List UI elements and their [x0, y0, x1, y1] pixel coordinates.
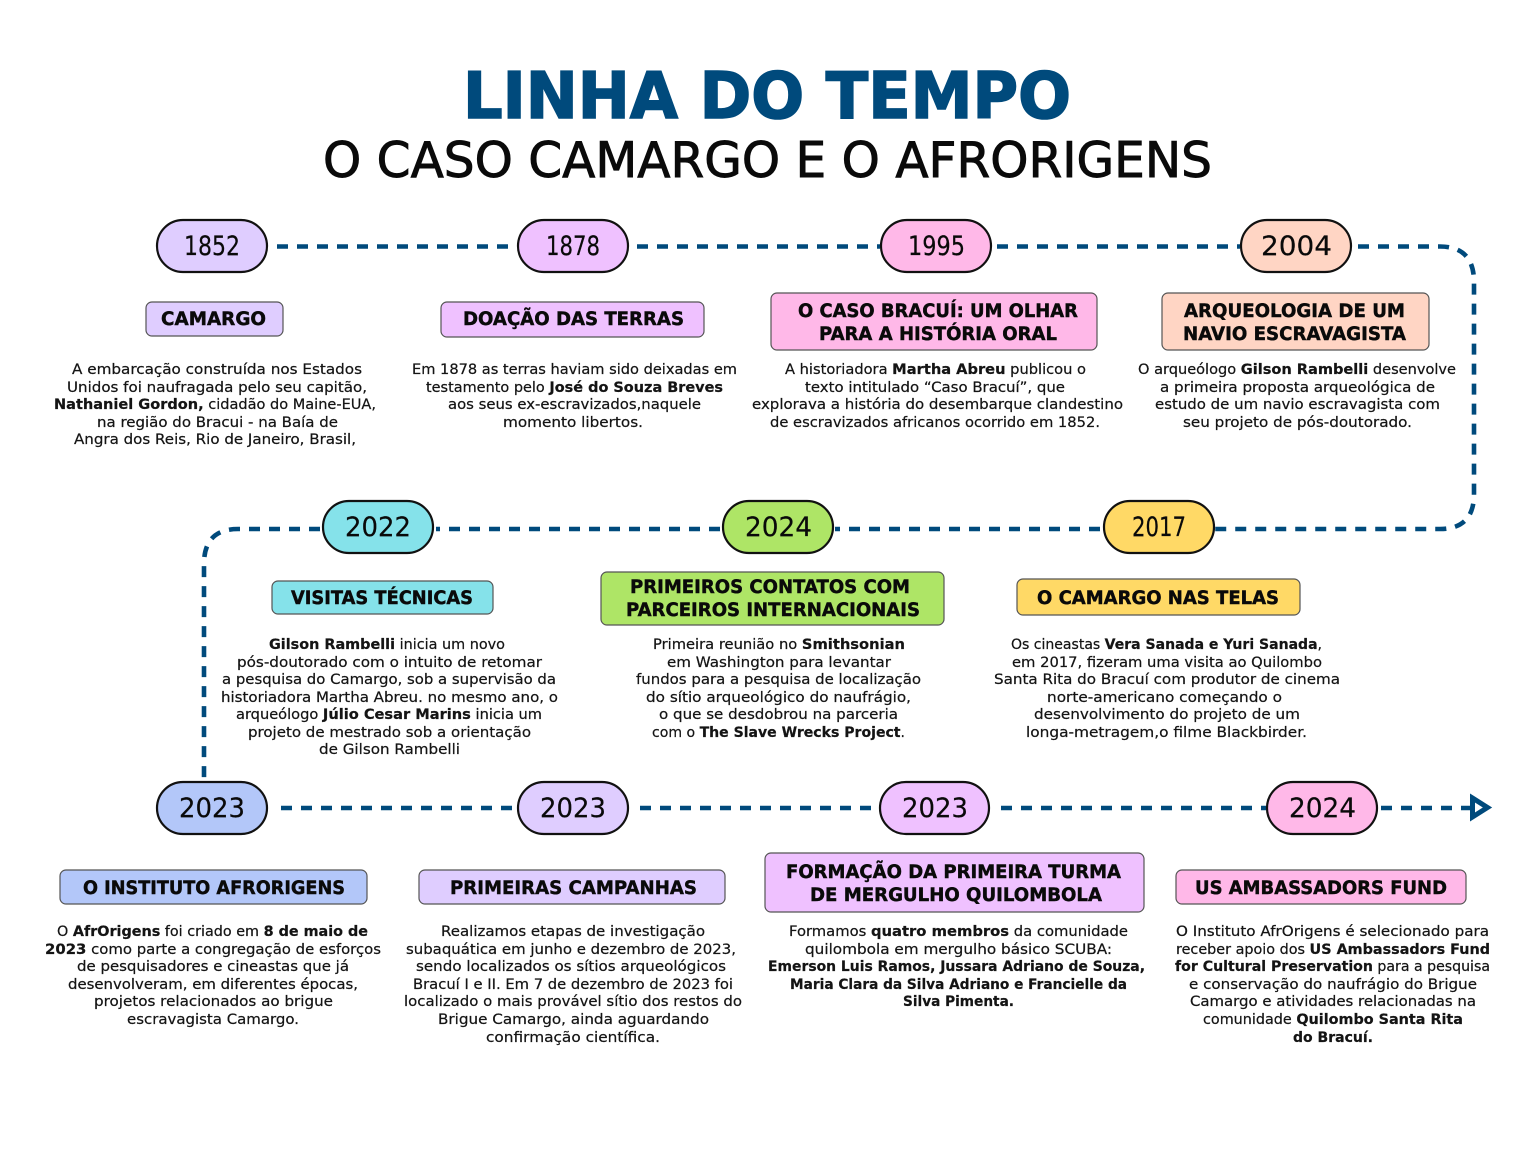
year pill 2024: 2024 — [745, 512, 812, 543]
year pill 2023 — [157, 782, 267, 834]
text block: em Washington para levantar — [667, 655, 891, 671]
text block: aos seus ex-escravizados,naquele — [448, 397, 701, 413]
text block — [221, 637, 558, 758]
text block: A historiadora Martha Abreu publicou o — [785, 362, 1086, 378]
text block: for Cultural Preservation para a pesquisa — [1175, 959, 1490, 975]
text block: subaquática em junho e dezembro de 2023, — [406, 942, 736, 958]
text block: sendo localizados os sítios arqueológicos — [416, 959, 726, 975]
text block: Maria Clara da Silva Adriano e Francielle da — [790, 977, 1127, 993]
text block: escravagista Camargo. — [127, 1012, 299, 1028]
heading: O caso Bracuí — [771, 293, 1097, 350]
text block: desenvolvimento do projeto de um — [1034, 707, 1300, 723]
year pill 1852: 1852 — [184, 231, 240, 262]
heading: O Camargo nas telas: O CAMARGO NAS TELAS — [1037, 587, 1279, 609]
text block: 2023 como parte a congregação de esforços — [45, 942, 381, 958]
text block: Emerson Luis Ramos, Jussara Adriano de Souza, — [768, 959, 1145, 975]
text block: Santa Rita do Bracuí com produtor de cinema — [994, 672, 1340, 688]
text block — [636, 637, 921, 741]
heading: Arqueologia — [1162, 293, 1429, 350]
text block: projetos relacionados ao brigue — [94, 994, 333, 1010]
year pill 2024 — [723, 501, 833, 553]
text block: Silva Pimenta. — [903, 994, 1014, 1010]
text block — [54, 362, 376, 448]
text block: longa-metragem,o filme Blackbirder. — [1026, 725, 1307, 741]
milestone: 2024 US Ambassadors Fund — [1175, 782, 1490, 1046]
text block: testamento pelo José do Souza Breves — [426, 380, 723, 396]
heading: Primeiros contatos: PRIMEIROS CONTATOS COM — [630, 576, 910, 598]
dashed timeline path — [204, 246, 1474, 808]
text block — [994, 637, 1340, 741]
text block: seu projeto de pós-doutorado. — [1183, 415, 1412, 431]
year pill 1995: 1995 — [908, 231, 965, 262]
text block: Unidos foi naufragada pelo seu capitão, — [67, 380, 367, 396]
text block: texto intitulado “Caso Bracuí”, que — [805, 380, 1065, 396]
text block: de Gilson Rambelli — [319, 742, 460, 758]
year pill 2024: 2024 — [1289, 793, 1356, 824]
heading: US Ambassadors Fund — [1176, 870, 1466, 904]
text block: quilombola em mergulho básico SCUBA: — [805, 942, 1112, 958]
text block: explorava a história do desembarque clandestino — [752, 397, 1123, 413]
year pill 2023 — [880, 782, 989, 834]
heading: O Instituto AfrOrigens: O INSTITUTO AFRORIGENS — [83, 877, 345, 899]
year pill 2004: 2004 — [1261, 231, 1332, 262]
text block: receber apoio dos US Ambassadors Fund — [1176, 942, 1490, 958]
milestone: 2022 Visitas técnicas — [221, 501, 558, 758]
text block: a primeira proposta arqueológica de — [1160, 380, 1435, 396]
heading: Visitas técnicas — [272, 581, 493, 614]
year pill 2023: 2023 — [902, 793, 968, 824]
text block: Bracuí I e II. Em 7 de dezembro de 2023 foi — [413, 977, 733, 993]
text block: Angra dos Reis, Rio de Janeiro, Brasil, — [74, 432, 356, 448]
text block — [45, 924, 381, 1028]
text block: pós-doutorado com o intuito de retomar — [237, 655, 542, 671]
text block: Camargo e atividades relacionadas na — [1190, 994, 1476, 1010]
heading: Doação das terras: DOAÇÃO DAS TERRAS — [463, 306, 684, 330]
heading: Formação — [765, 853, 1144, 912]
text block: estudo de um navio escravagista com — [1155, 397, 1440, 413]
text block — [1138, 362, 1456, 431]
text block: com o The Slave Wrecks Project. — [652, 725, 905, 741]
text block — [1175, 924, 1490, 1046]
text block: Brigue Camargo, ainda aguardando — [438, 1012, 709, 1028]
text block: norte-americano começando o — [1047, 690, 1282, 706]
heading: Doação das terras — [441, 302, 704, 337]
text block: desenvolveram, em diferentes épocas, — [68, 977, 358, 993]
heading: Visitas técnicas: VISITAS TÉCNICAS — [291, 586, 473, 609]
text block: e conservação do naufrágio do Brigue — [1189, 977, 1477, 993]
heading: Camargo — [146, 302, 283, 336]
milestone: 1878 Doação das terras — [412, 220, 737, 431]
text block: O AfrOrigens foi criado em 8 de maio de — [57, 924, 368, 940]
year pill 2023: 2023 — [179, 793, 245, 824]
text block: a pesquisa do Camargo, sob a supervisão da — [222, 672, 556, 688]
subtitle: O CASO CAMARGO E O AFRORIGENS — [323, 132, 1212, 189]
heading: US Ambassadors Fund: US AMBASSADORS FUND — [1195, 877, 1447, 899]
text block: A embarcação construída nos Estados — [72, 362, 362, 378]
text block: do Bracuí. — [1293, 1030, 1373, 1046]
text block: em 2017, fizeram uma visita ao Quilombo — [1012, 655, 1322, 671]
heading: Primeiras campanhas: PRIMEIRAS CAMPANHAS — [450, 877, 697, 899]
text block: Gilson Rambelli inicia um novo — [269, 637, 505, 653]
arrow head — [1472, 798, 1488, 817]
milestone: 2023 O Instituto AfrOrigens — [45, 782, 381, 1028]
heading: O Instituto AfrOrigens — [60, 870, 367, 904]
text block: momento libertos. — [503, 415, 643, 431]
milestone: 2023 Formação da primeira turma — [765, 782, 1145, 1010]
heading: Primeiras campanhas — [419, 870, 725, 904]
milestone: 2024 Primeiros contatos — [601, 501, 944, 741]
text block — [752, 362, 1123, 431]
year pill 2023: 2023 — [540, 793, 606, 824]
text block: arqueólogo Júlio Cesar Marins inicia um — [236, 707, 542, 723]
milestone: 1995 O caso Bracuí — [752, 220, 1123, 431]
text block — [768, 924, 1145, 1010]
year pill 2017: 2017 — [1132, 512, 1186, 543]
year pill 2022: 2022 — [345, 512, 411, 543]
text block: de escravizados africanos ocorrido em 1852. — [770, 415, 1100, 431]
text block: Formamos quatro membros da comunidade — [789, 924, 1128, 940]
text block: confirmação científica. — [486, 1030, 660, 1046]
heading: O caso Bracuí: O CASO BRACUÍ: UM OLHAR — [798, 299, 1078, 322]
year pill 1878 — [518, 220, 628, 272]
text block: O Instituto AfrOrigens é selecionado para — [1176, 924, 1489, 940]
text block: projeto de mestrado sob a orientação — [248, 725, 531, 741]
text block: de pesquisadores e cineastas que já — [77, 959, 349, 975]
year pill 2017 — [1104, 501, 1214, 553]
text block: Realizamos etapas de investigação — [441, 924, 705, 940]
milestone: 1852 Camargo — [54, 220, 376, 448]
text block: Nathaniel Gordon, cidadão do Maine-EUA, — [54, 397, 376, 413]
year pill 1878: 1878 — [546, 231, 600, 262]
milestone: 2017 O Camargo nas telas — [994, 501, 1340, 741]
title: LINHA DO TEMPO — [463, 60, 1071, 134]
text block: O arqueólogo Gilson Rambelli desenvolve — [1138, 362, 1456, 378]
text block: historiadora Martha Abreu. no mesmo ano, o — [221, 690, 558, 706]
text block: fundos para a pesquisa de localização — [636, 672, 921, 688]
heading: Formação: FORMAÇÃO DA PRIMEIRA TURMA — [786, 859, 1121, 883]
heading: Camargo: CAMARGO — [161, 308, 266, 330]
text block: o que se desdobrou na parceria — [659, 707, 898, 723]
year pill 2004 — [1241, 220, 1351, 272]
heading: Primeiros contatos — [601, 572, 944, 625]
heading: O Camargo nas telas — [1017, 579, 1300, 615]
text block: localizado o mais provável sítio dos restos do — [404, 994, 742, 1010]
text block — [412, 362, 737, 431]
text block: na região do Bracui - na Baía de — [97, 415, 338, 431]
year pill 1852 — [157, 220, 267, 272]
text block: Em 1878 as terras haviam sido deixadas em — [412, 362, 737, 378]
year pill 2023 — [518, 782, 628, 834]
year pill 2024 — [1267, 782, 1377, 834]
heading: Primeiros contatos: PARCEIROS INTERNACIONAIS — [626, 599, 920, 621]
milestone: 2004 Arqueologia — [1138, 220, 1456, 431]
text block: do sítio arqueológico do naufrágio, — [646, 690, 911, 706]
text block: Primeira reunião no Smithsonian — [653, 637, 905, 653]
heading: Formação: DE MERGULHO QUILOMBOLA — [810, 884, 1102, 906]
text block — [404, 924, 742, 1046]
year pill 1995 — [881, 220, 991, 272]
heading: Arqueologia: ARQUEOLOGIA DE UM — [1184, 300, 1405, 322]
milestone: 2023 Primeiras campanhas — [404, 782, 742, 1046]
text block: Os cineastas Vera Sanada e Yuri Sanada, — [1011, 637, 1322, 653]
heading: Arqueologia: NAVIO ESCRAVAGISTA — [1183, 323, 1406, 345]
text block: comunidade Quilombo Santa Rita — [1203, 1012, 1463, 1028]
year pill 2022 — [323, 501, 433, 553]
heading: O caso Bracuí: PARA A HISTÓRIA ORAL — [819, 321, 1057, 345]
